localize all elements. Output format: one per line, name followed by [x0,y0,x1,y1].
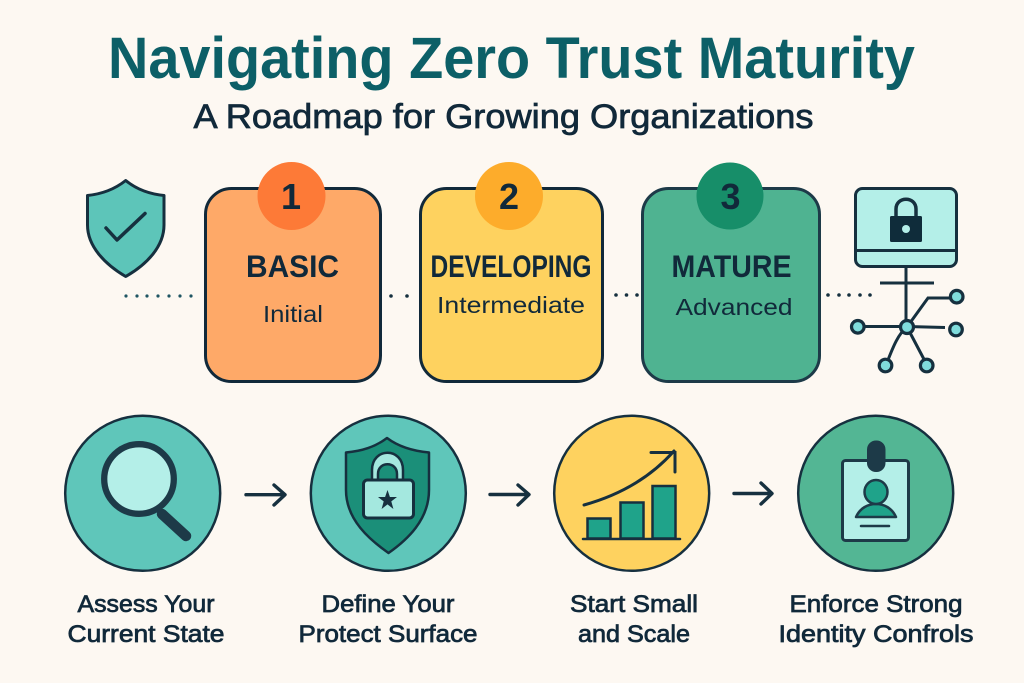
subtitle: A Roadmap for Growing Organizations [194,98,814,136]
badge 2 [475,162,543,230]
caption: scale: and Scale [578,621,690,648]
step: scale icon [554,416,709,571]
mature sublabel: Advanced [676,294,792,320]
step: protect icon [311,416,466,571]
badge 3 [696,162,764,230]
caption: identity: Enforce Strong [790,591,962,618]
badge 1 [258,162,326,230]
dotted connector: basic to developing [389,294,409,298]
badge 1: 1 [281,176,301,217]
dotted connector: start to basic [124,294,193,298]
developing sublabel: Intermediate [437,292,585,318]
caption: scale: Start Small [570,591,698,618]
icon: shield with check [88,180,164,276]
step: assess icon [65,416,220,571]
mature label: MATURE [672,248,792,284]
panel: mature [642,162,820,382]
step: identity icon [798,416,953,571]
panel: basic [206,162,380,382]
caption: identity: Identity Confrols [778,621,974,648]
caption: protect: Protect Surface [298,621,478,648]
arrow 1 [246,485,285,505]
badge 2: 2 [499,176,519,217]
arrow 3 [734,483,772,504]
caption: assess: Current State [68,621,224,648]
icon: monitor with lock and network [852,188,963,372]
dotted connector: mature to network [826,293,872,297]
basic sublabel: Initial [263,301,323,327]
badge 3: 3 [720,176,741,217]
panel: developing [420,162,602,382]
arrow 2 [490,485,529,505]
basic label: BASIC [246,248,339,284]
caption: protect: Define Your [322,591,454,618]
caption: assess: Assess Your [78,591,214,618]
dotted connector: developing to mature [614,293,639,297]
developing label: DEVELOPING [430,248,592,284]
title: Navigating Zero Trust Maturity [108,26,915,91]
